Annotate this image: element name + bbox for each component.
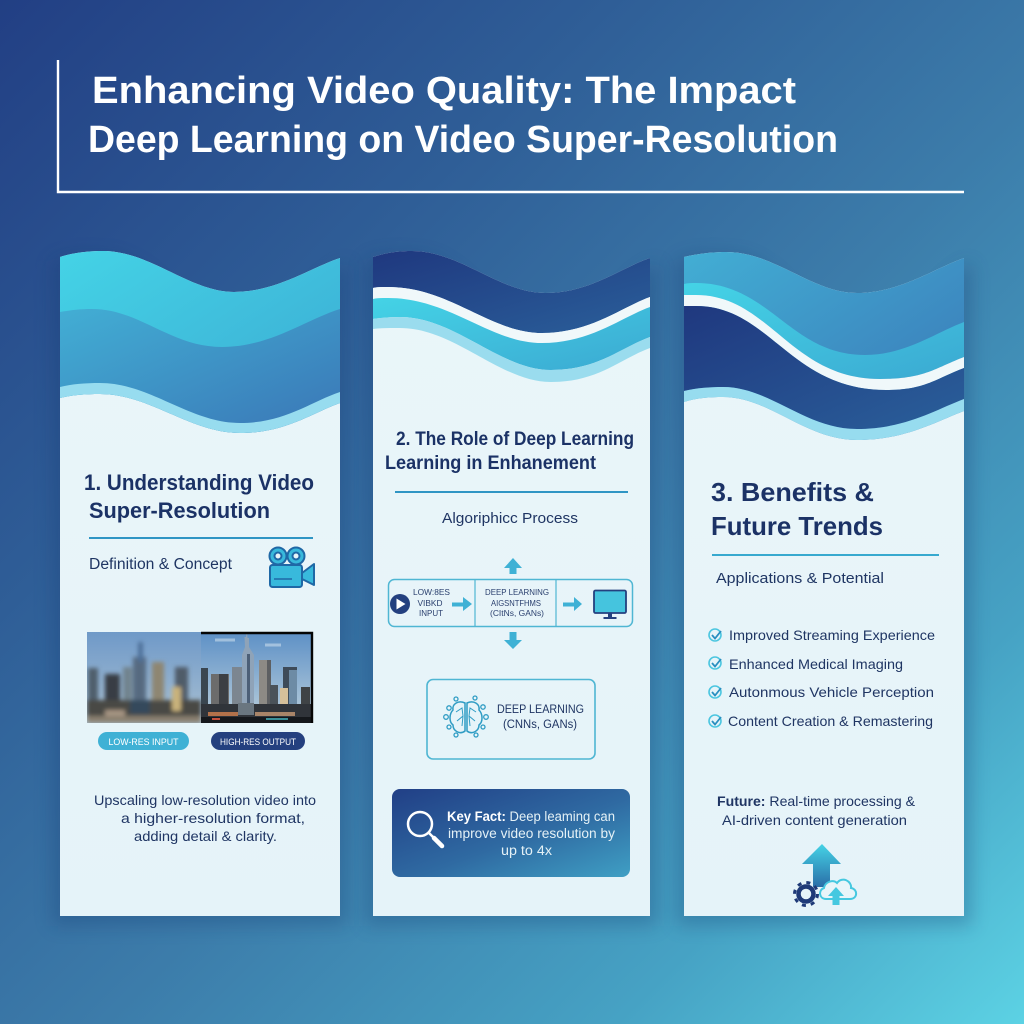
heading	[385, 429, 634, 474]
callout: key fact	[392, 789, 630, 877]
box label	[497, 704, 584, 731]
subheading: Applications & Potential	[716, 570, 884, 587]
input label: INPUT	[419, 608, 443, 618]
heading	[84, 470, 314, 523]
before and after city photo	[87, 632, 313, 723]
future note: Future: Real-time processing &	[717, 793, 916, 809]
benefits list	[709, 627, 935, 729]
heading: 1. Understanding Video	[84, 470, 314, 495]
icon: growth arrow, gear and cloud	[794, 844, 856, 906]
callout: key fact: up to 4x	[501, 843, 552, 858]
heading	[711, 477, 883, 541]
description: a higher-resolution format,	[121, 810, 305, 826]
future note	[717, 793, 916, 828]
title block	[58, 60, 964, 192]
algorithm label: DEEP LEARNING	[485, 587, 549, 597]
arrow: up	[504, 558, 522, 574]
callout: key fact: Key Fact: Deep leaming can	[447, 809, 615, 824]
box label: DEEP LEARNING	[497, 704, 584, 716]
title block: Enhancing Video Quality: The Impact	[92, 70, 796, 112]
heading: Future Trends	[711, 511, 883, 541]
benefits list: Enhanced Medical Imaging	[729, 656, 903, 672]
title block: Deep Learning on Video Super-Resolution	[88, 119, 838, 161]
label: high-res output: HIGH-RES OUTPUT	[220, 737, 296, 748]
panel: understanding video super-resolution	[52, 251, 348, 926]
subheading: Algoriphicc Process	[442, 510, 578, 527]
heading: 3. Benefits &	[711, 477, 874, 507]
label: high-res output	[211, 732, 305, 750]
icon: magnifier	[408, 812, 442, 846]
heading: Learning in Enhanement	[385, 453, 597, 474]
description: Upscaling low-resolution video into	[94, 792, 316, 808]
panel: benefits and future trends	[676, 252, 972, 926]
icon: play button	[390, 594, 410, 614]
panel: the role of deep learning	[365, 251, 658, 926]
arrow: down	[504, 632, 522, 649]
algorithm label: AIGSNTFHMS	[491, 598, 541, 608]
benefits list: Improved Streaming Experience	[729, 627, 935, 643]
box label: (CNNs, GANs)	[503, 719, 577, 731]
icon: video camera	[270, 548, 314, 587]
icon: neural brain	[444, 696, 488, 737]
input label: LOW:8ES	[413, 587, 450, 597]
algorithm label	[485, 587, 549, 618]
subheading: Definition & Concept	[89, 556, 233, 573]
arrow: to algorithms	[452, 597, 472, 611]
deep learning box	[427, 680, 595, 759]
description	[94, 792, 316, 844]
benefits list: Content Creation & Remastering	[728, 713, 933, 729]
description: adding detail & clarity.	[134, 828, 277, 844]
future note: AI-driven content generation	[722, 812, 907, 828]
process flow	[388, 580, 632, 626]
label: low-res input: LOW-RES INPUT	[108, 737, 179, 748]
arrow: to monitor	[563, 597, 582, 611]
input label	[413, 587, 450, 618]
callout: key fact: improve video resolution by	[448, 826, 615, 841]
heading: Super-Resolution	[89, 498, 270, 523]
label: low-res input	[98, 732, 189, 750]
algorithm label: (CItNs, GANs)	[490, 608, 544, 618]
heading: 2. The Role of Deep Learning	[396, 429, 634, 450]
benefits list: Autonmous Vehicle Perception	[729, 684, 934, 700]
icon: monitor	[594, 590, 626, 619]
input label: VIBKD	[418, 598, 442, 608]
